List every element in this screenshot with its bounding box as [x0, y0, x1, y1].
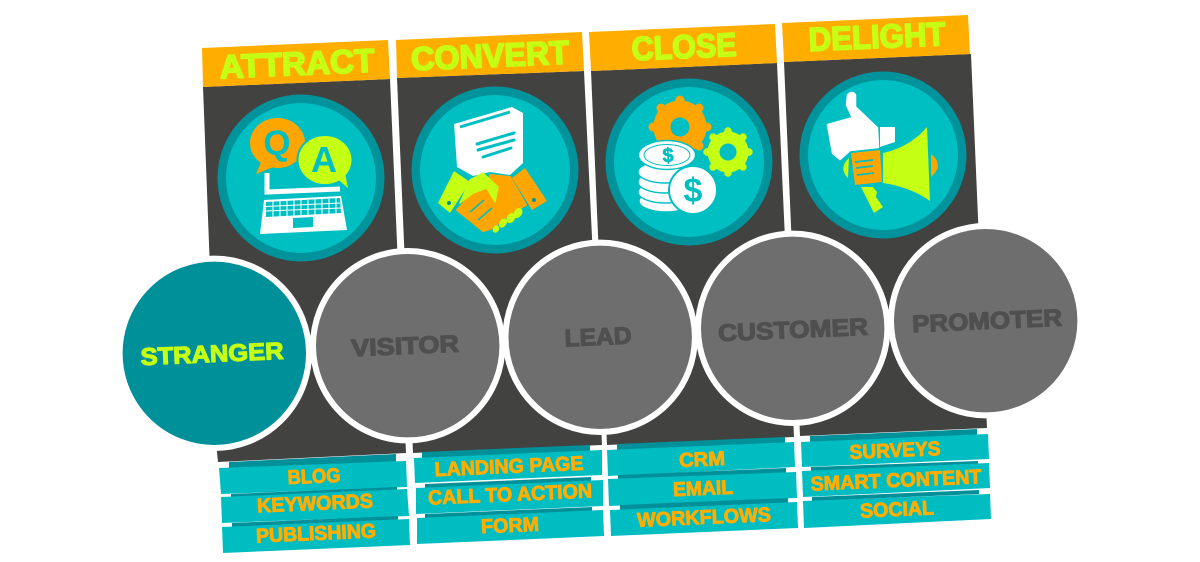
stage label: CUSTOMER: CUSTOMER — [718, 314, 869, 347]
list item: WORKFLOWS: WORKFLOWS — [637, 504, 771, 532]
heading: ATTRACT: ATTRACT — [219, 42, 375, 85]
icon: gears and coins: $ — [662, 145, 674, 167]
heading: CLOSE: CLOSE — [631, 26, 737, 67]
list item: BLOG: BLOG — [287, 465, 341, 489]
heading: CONVERT: CONVERT — [410, 34, 570, 77]
list item: LANDING PAGE: LANDING PAGE — [434, 453, 584, 481]
panel: attract column — [202, 40, 410, 553]
icon: gears and coins — [606, 78, 772, 246]
stage: stranger — [120, 259, 309, 448]
stage label: VISITOR: VISITOR — [351, 331, 460, 362]
list: close tools — [607, 437, 798, 536]
stage label: PROMOTER: PROMOTER — [912, 305, 1063, 338]
icon: thumbs up and megaphone — [800, 72, 966, 238]
heading band: attract — [202, 40, 390, 87]
list item: SOCIAL: SOCIAL — [860, 497, 934, 523]
list item: CALL TO ACTION: CALL TO ACTION — [428, 480, 592, 510]
panel: delight column — [782, 15, 991, 528]
stage: customer — [698, 234, 887, 423]
panel: convert column — [396, 32, 604, 544]
stage: visitor — [313, 251, 502, 440]
list item: CRM: CRM — [679, 448, 726, 472]
stage: promoter — [891, 226, 1080, 415]
stage label: STRANGER: STRANGER — [140, 338, 284, 371]
panel background: attract — [203, 79, 406, 462]
stage: lead — [506, 243, 695, 432]
panel background: convert — [397, 71, 602, 453]
heading band: close — [589, 24, 777, 71]
panel: close column — [589, 24, 798, 536]
list item: FORM: FORM — [481, 514, 539, 538]
list item: EMAIL: EMAIL — [673, 477, 733, 501]
list item: PUBLISHING: PUBLISHING — [256, 520, 376, 548]
list item: SMART CONTENT: SMART CONTENT — [810, 466, 982, 496]
list item: SURVEYS: SURVEYS — [849, 438, 941, 464]
icon: questions and answers on a laptop: A — [311, 139, 337, 180]
list: convert tools — [414, 445, 604, 544]
list: attract tools — [219, 454, 410, 553]
icon: questions and answers on a laptop: Q — [263, 124, 291, 163]
heading band: delight — [782, 15, 970, 62]
panel background: close — [591, 63, 794, 445]
icon: questions and answers on a laptop — [218, 94, 384, 262]
heading band: convert — [396, 32, 584, 78]
icon: handshake under a document — [412, 86, 578, 254]
list item: KEYWORDS: KEYWORDS — [257, 490, 373, 518]
panel background: delight — [784, 54, 987, 436]
stage label: LEAD: LEAD — [564, 323, 632, 352]
icon: gears and coins: $ — [684, 172, 703, 210]
list: delight tools — [801, 429, 991, 528]
heading: DELIGHT: DELIGHT — [808, 15, 946, 58]
